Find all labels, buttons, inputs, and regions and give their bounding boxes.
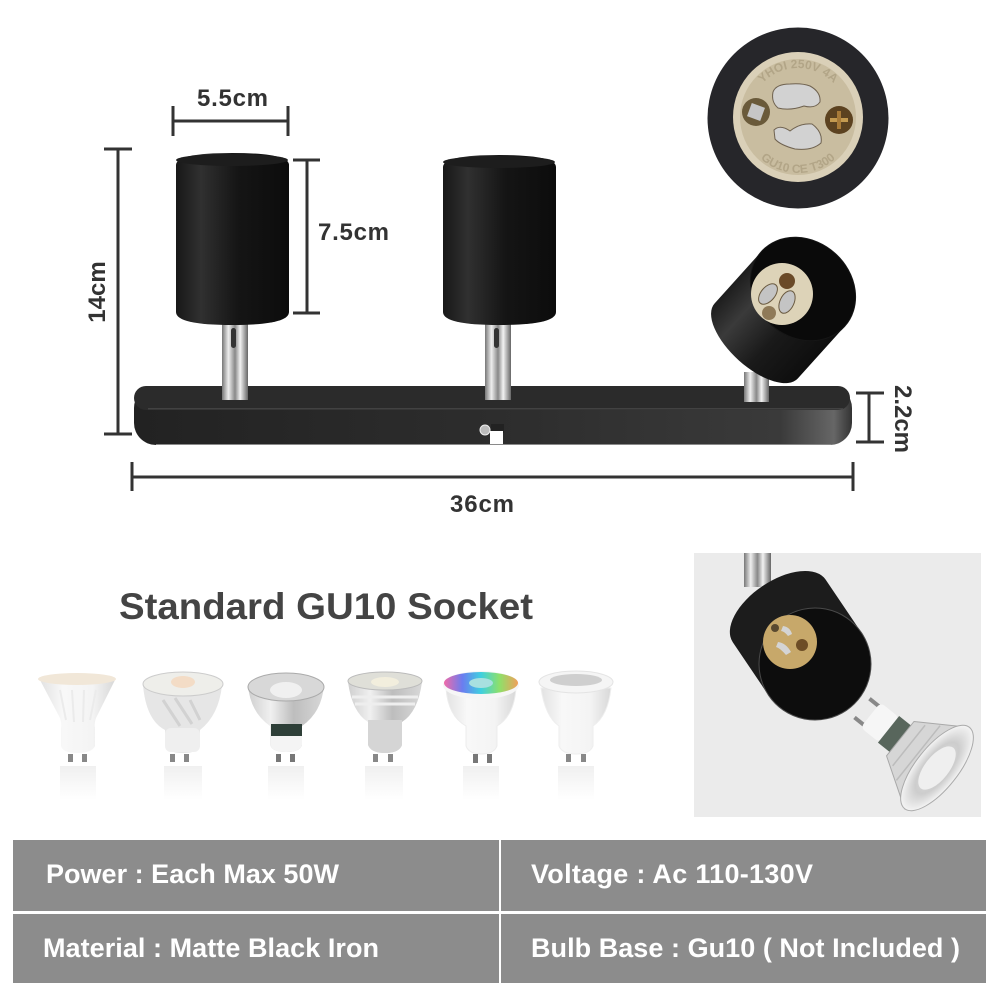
dimension: 36cm overall length: 36cm (450, 491, 514, 518)
cell: material: Material : Matte Black Iron (43, 933, 379, 963)
dimension: 7.5cm cup height: 7.5cm (318, 219, 389, 246)
middle pole (485, 322, 511, 400)
bulb 3: glass halogen (248, 673, 324, 800)
tilted black cup (716, 555, 893, 742)
bulb row (38, 671, 613, 800)
socket markings: YHOI 250V 4A (757, 60, 836, 83)
GU10 halogen bulb (830, 667, 986, 822)
bulb 6: white LED (539, 671, 613, 800)
left cup (176, 153, 289, 325)
contact slot bottom (774, 124, 821, 149)
stem (744, 553, 771, 587)
fixture: three-head spotlight bar (134, 153, 877, 445)
socket markings (757, 60, 836, 173)
dimension: 14cm overall height: 14cm (84, 261, 111, 323)
cell: power: Power : Each Max 50W (46, 859, 340, 889)
bulb 1: white ribbed LED (38, 673, 116, 800)
photo panel: bulb being inserted (694, 553, 986, 822)
bulb 4: clear glass LED (348, 672, 422, 800)
middle cup (443, 155, 556, 325)
socket close-up circle (708, 28, 888, 208)
mounting base bar (134, 386, 852, 445)
dimension: 5.5cm width (173, 85, 288, 136)
bulb 2: grey swirl LED (143, 672, 223, 800)
cell: bulb base: Bulb Base : Gu10 ( Not Included ) (531, 933, 960, 963)
spec table (13, 840, 986, 983)
dimension: 2.2cm base height: 2.2cm (889, 385, 916, 453)
dimension: 14cm overall height (84, 149, 132, 434)
cell: bulb base (501, 914, 986, 983)
right tilted cup with socket (697, 216, 877, 398)
right pole (744, 372, 769, 402)
heading: Standard GU10 Socket (119, 586, 533, 627)
cell: material (13, 914, 499, 983)
screw left (742, 98, 770, 126)
bulb 5: RGB smart LED (443, 671, 519, 800)
dimension: 7.5cm cup height (293, 160, 389, 313)
dimension: 2.2cm base height (856, 385, 916, 453)
socket markings: GU10 CE T300 (762, 154, 834, 173)
contact slot top (773, 84, 820, 109)
dimension: 5.5cm width: 5.5cm (197, 85, 268, 112)
dimension: 36cm overall length (132, 462, 853, 518)
left pole (222, 322, 248, 400)
cell: power (13, 840, 499, 911)
cell: voltage (501, 840, 986, 911)
cell: voltage: Voltage : Ac 110-130V (531, 859, 813, 889)
screw right (825, 106, 853, 134)
